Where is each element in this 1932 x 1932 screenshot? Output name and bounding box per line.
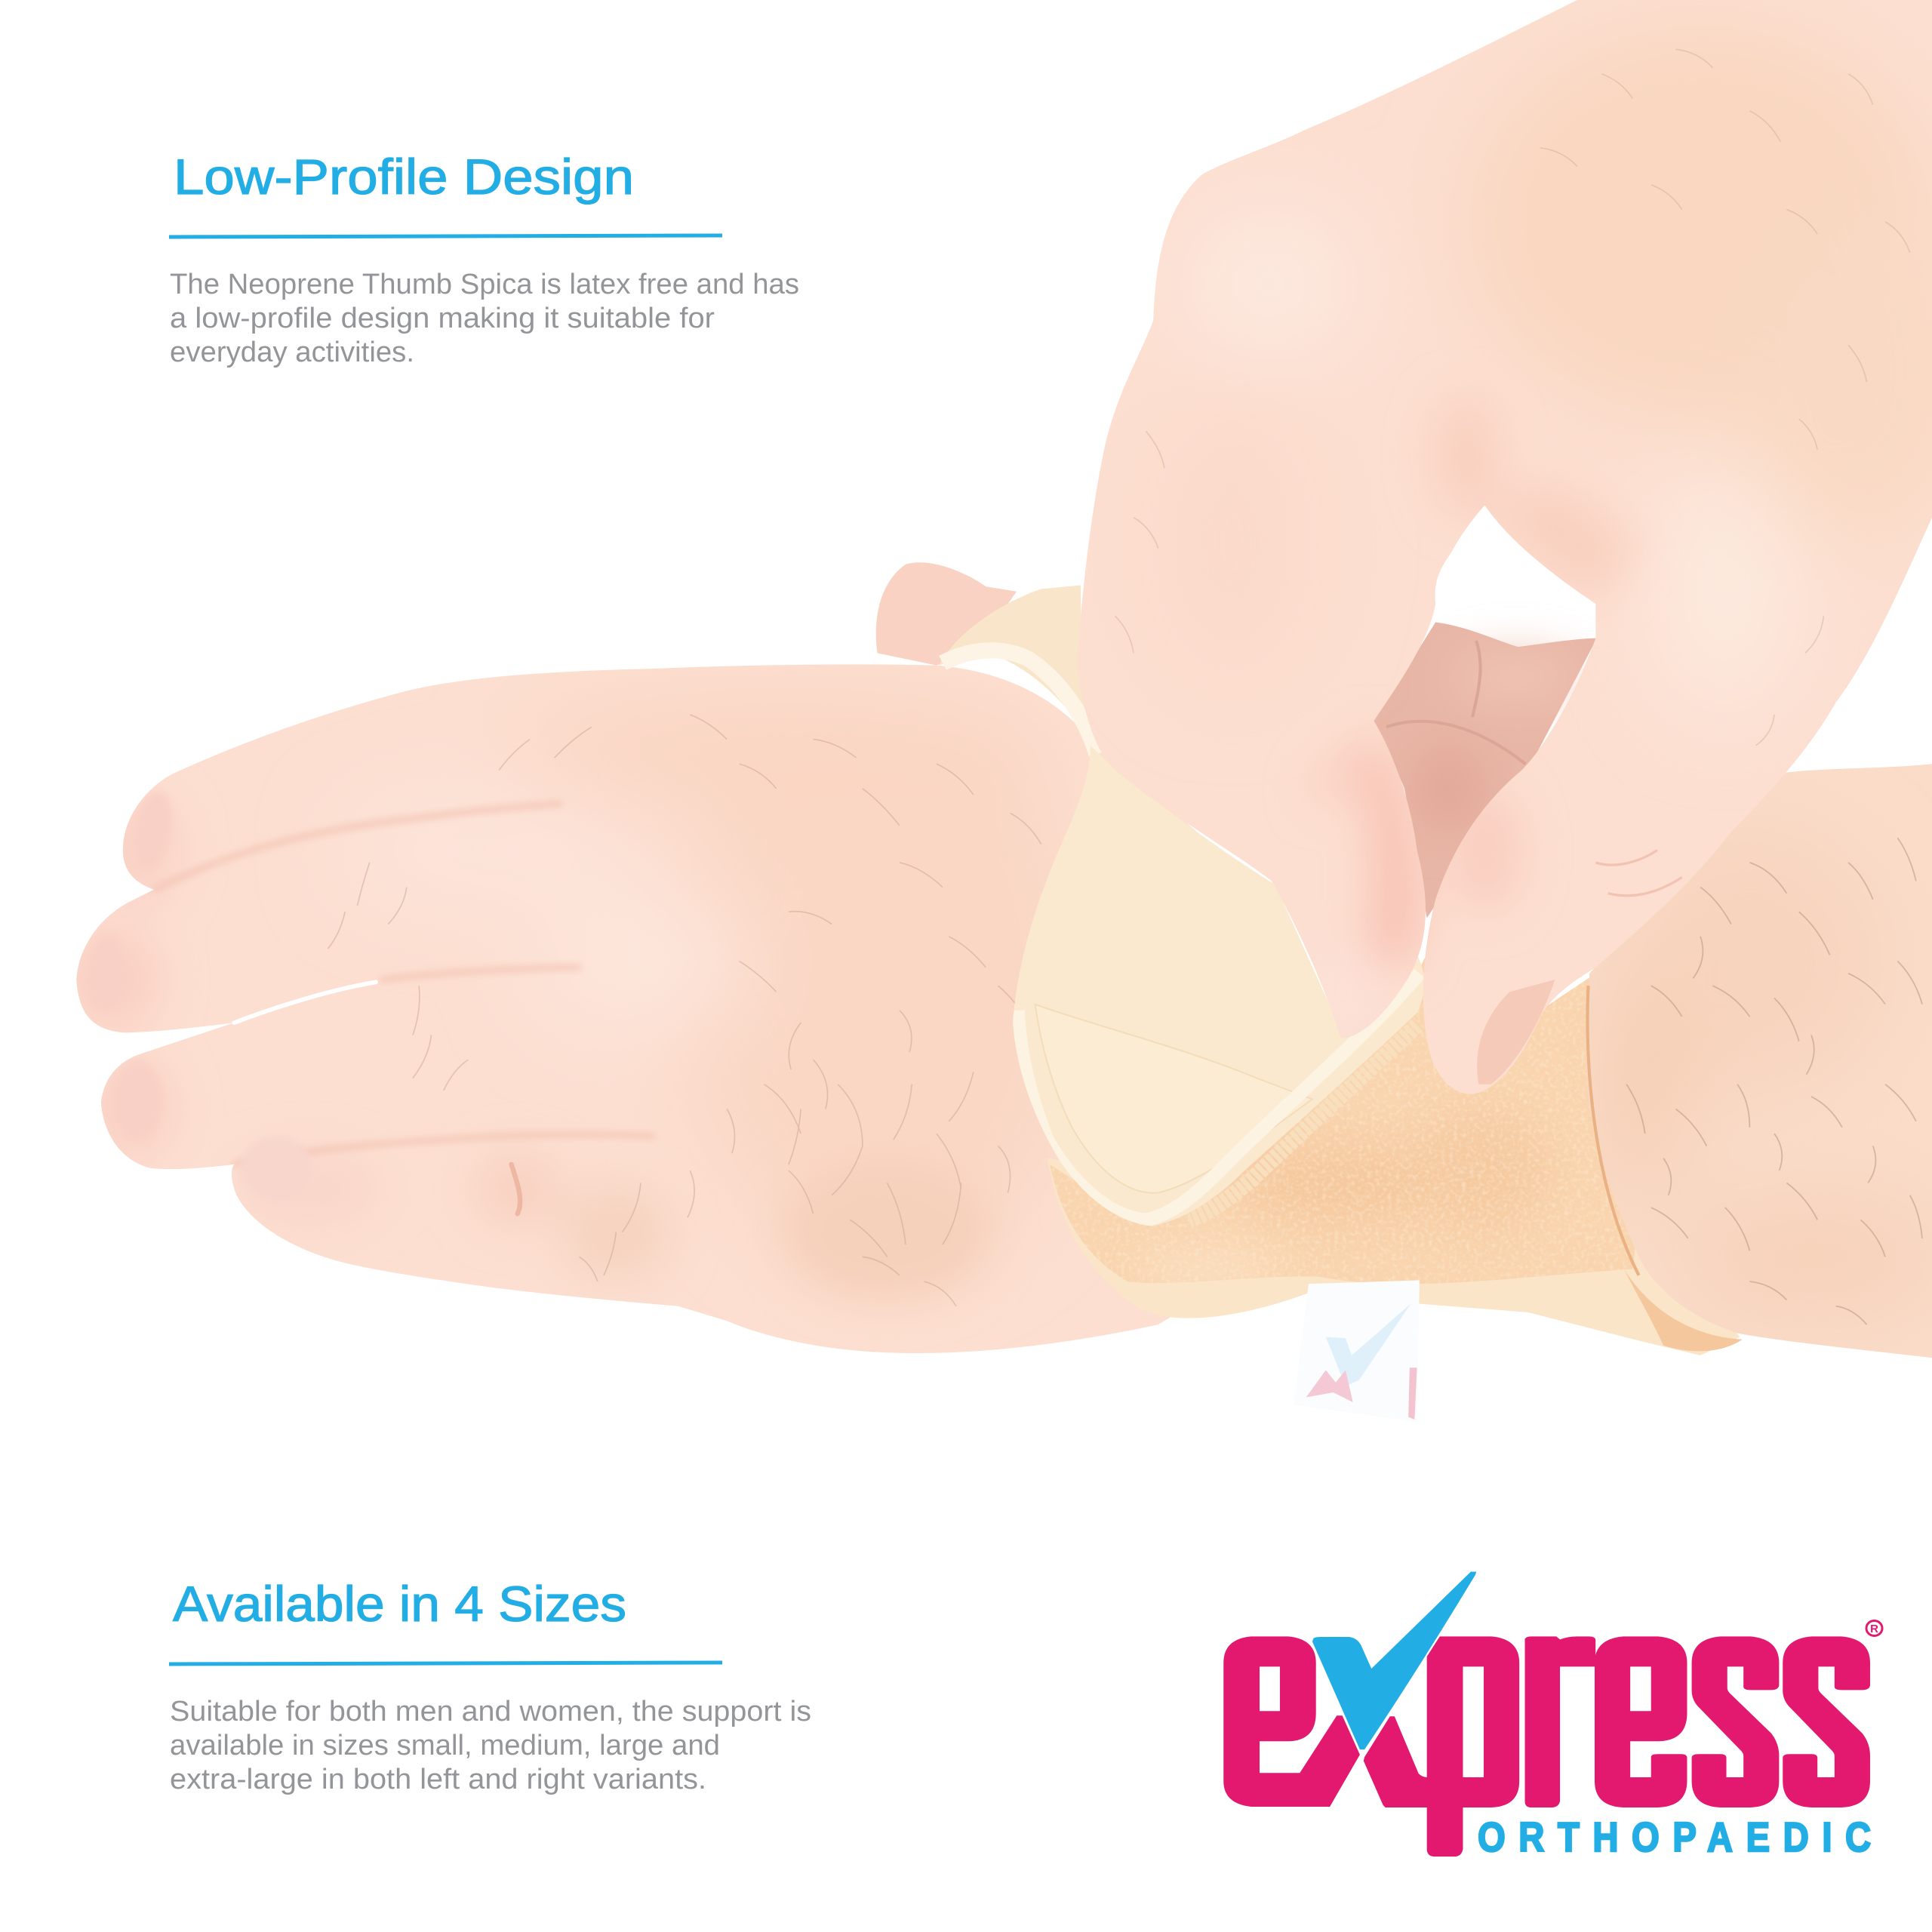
body text: [170, 1696, 811, 1795]
brace outer tan edge: [1587, 986, 1743, 1351]
photo: hands fastening thumb spica brace: [62, 0, 1932, 1422]
body text: available in sizes small, medium, large and: [170, 1730, 720, 1761]
back of hand hair: [328, 715, 1041, 1306]
fingernails: [149, 795, 305, 1165]
body text: a low-profile design making it suitable for: [170, 303, 715, 334]
hand hair: [1115, 49, 1910, 746]
left hand thumb behind brace: [876, 562, 1017, 666]
heading: Low-Profile Design: [174, 149, 634, 205]
body text: extra-large in both left and right variants.: [170, 1764, 706, 1795]
upper hand: [1077, 0, 1932, 1094]
body text: everyday activities.: [170, 337, 414, 368]
body text: [170, 269, 799, 368]
left hand: [62, 664, 1232, 1353]
brace body and velcro strap: [1048, 949, 1740, 1355]
brace top tab around thumb: [939, 586, 1097, 754]
logo: express orthopaedic: [1223, 1572, 1882, 1860]
left hand fingers seen through the gap: [1374, 623, 1597, 918]
registered mark: [1866, 1621, 1882, 1636]
heading underline: [169, 1660, 722, 1666]
right forearm: [1586, 764, 1932, 1358]
heading underline: [169, 234, 722, 238]
body text: Suitable for both men and women, the support is: [170, 1696, 811, 1727]
brace label tag: [1294, 1280, 1420, 1422]
heading: Available in 4 Sizes: [173, 1576, 626, 1632]
section: low-profile design: [169, 149, 799, 368]
logo subtitle: ORTHOPAEDIC: [1478, 1814, 1871, 1860]
logo wordmark: [1223, 1572, 1870, 1857]
finger separations: [154, 804, 653, 1164]
section: available in 4 sizes: [169, 1576, 811, 1795]
thumb nail: [1477, 980, 1555, 1084]
registered mark: R: [1870, 1623, 1878, 1635]
body text: The Neoprene Thumb Spica is latex free and has: [170, 269, 799, 300]
terry hook band along flap edge: [1189, 1025, 1417, 1220]
brace flap: [1013, 746, 1424, 1226]
